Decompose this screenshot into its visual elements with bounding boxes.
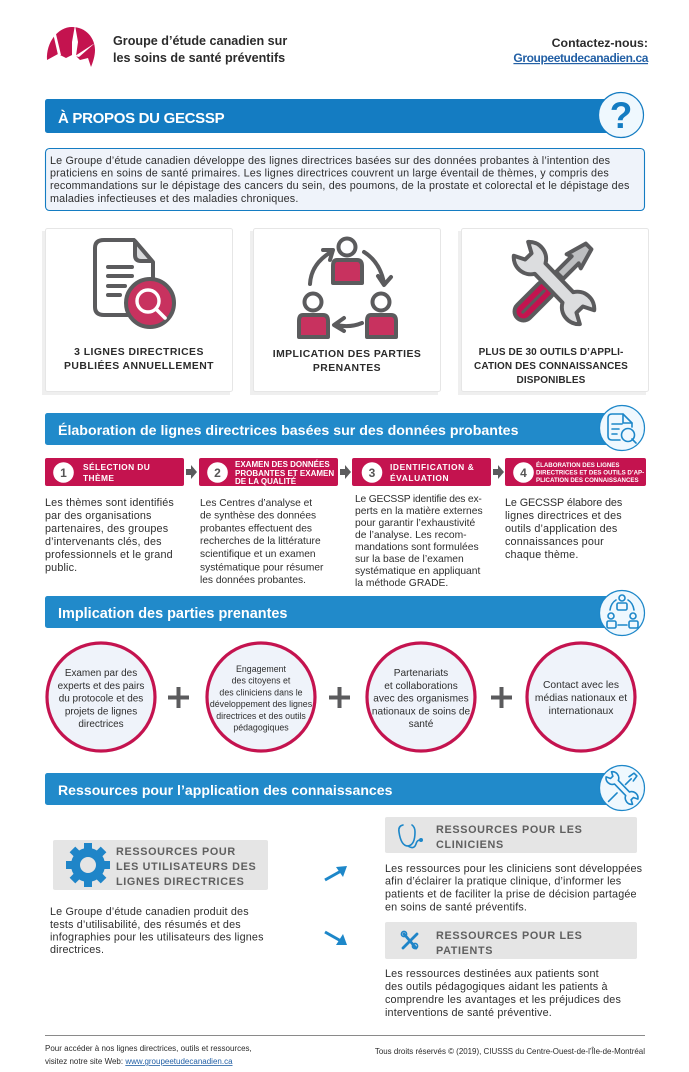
text: patients: Les ressources destinées aux patients sont (385, 968, 599, 980)
step 4: 4 (520, 466, 527, 480)
step 4: outils d’application des (505, 523, 618, 535)
logo: maple leaf (47, 25, 95, 67)
circle: examen: Examen par des (65, 668, 137, 679)
step 2: DE LA QUALITÉ (235, 477, 297, 486)
arrow (340, 465, 351, 479)
step 1: professionnels et le grand (45, 549, 173, 561)
about text panel: maladies infectieuses et des maladies chroniques. (50, 193, 299, 205)
circle: engagement: des citoyens et (232, 676, 291, 686)
step 4 (505, 458, 646, 561)
heading: élaboration: Élaboration de lignes directrices basées sur des données probantes (58, 422, 519, 439)
circle: examen (47, 643, 155, 751)
heading: à propos: ? (610, 95, 632, 136)
resource box: patients (385, 922, 637, 959)
card: outils: DISPONIBLES (517, 375, 586, 386)
heading: ressources (45, 766, 644, 810)
card: parties prenantes: PRENANTES (313, 363, 381, 374)
resource box: cliniciens: CLINICIENS (436, 839, 504, 851)
step 1: par des organisations (45, 510, 152, 522)
step 1: partenaires, des groupes (45, 523, 169, 535)
circle: engagement (207, 643, 315, 751)
circle: examen: experts et des pairs (58, 681, 144, 692)
step 3: 3 (369, 466, 376, 480)
step 1: d’intervenants clés, des (45, 536, 162, 548)
text: patients: des outils pédagogiques aidant les patients à (385, 981, 608, 993)
circle: engagement: des cliniciens dans le (219, 687, 303, 697)
circle: partenariats (367, 643, 475, 751)
step 1: SÉLECTION DU (83, 462, 150, 472)
heading: élaboration (45, 406, 644, 450)
circle: examen: directrices (78, 719, 124, 730)
circle: partenariats: Partenariats (394, 668, 448, 679)
step 1 (45, 458, 184, 574)
plus (329, 687, 350, 708)
icon: wrench and screwdriver (510, 238, 598, 328)
step 4: DIRECTRICES ET DES OUTILS D’AP- (536, 470, 644, 477)
icon: three people with arrows (299, 238, 396, 337)
text: utilisateurs: infographies pour les utilisateurs des lignes (50, 932, 264, 944)
step 3: sur la base de l’examen (355, 554, 464, 565)
text: cliniciens: en soins de santé préventifs. (385, 902, 527, 914)
text: cliniciens: patients et de faciliter la prise de décision partagée (385, 889, 637, 901)
footer: access note: www.groupeetudecanadien.ca (124, 1057, 233, 1066)
step 2: systématique pour résumer (200, 562, 324, 573)
step 4: PLICATION DES CONNAISSANCES (536, 477, 639, 484)
card: lignes directrices: 3 LIGNES DIRECTRICES (74, 347, 204, 358)
step 3: systématique en appliquant (355, 566, 481, 577)
text: utilisateurs: Le Groupe d’étude canadien produit des (50, 906, 249, 918)
icon: stethoscope (399, 825, 423, 848)
icon: tools (401, 931, 418, 949)
text: cliniciens: Les ressources pour les cliniciens sont développées (385, 863, 642, 875)
step 3: Le GECSSP identifie des ex- (355, 494, 482, 505)
step 3: ÉVALUATION (390, 472, 449, 483)
circle: contact: internationaux (549, 706, 614, 717)
circle: contact: Contact avec les (543, 680, 619, 691)
resource box: cliniciens (385, 817, 637, 853)
card: lignes directrices: PUBLIÉES ANNUELLEMENT (64, 359, 214, 372)
step 2: de synthèse des données (200, 511, 316, 522)
circle: partenariats: nationaux de soins de (372, 706, 470, 717)
step 4: lignes directrices et des (505, 510, 622, 522)
circle: contact (527, 643, 635, 751)
resource box: patients: PATIENTS (436, 945, 493, 957)
resource box: utilisateurs: RESSOURCES POUR (116, 846, 236, 858)
circle: partenariats: avec des organismes (373, 694, 469, 705)
card: parties prenantes (250, 228, 440, 395)
text: patients: interventions de santé préventive. (385, 1007, 552, 1019)
step 3: de l’analyse. Les recom- (355, 530, 467, 541)
card: outils (458, 228, 648, 395)
text: utilisateurs: tests d’utilisabilité, des résumés et des (50, 919, 241, 931)
step 2: Les Centres d’analyse et (200, 498, 312, 509)
step 3: mandations sont formulées (355, 542, 479, 553)
step 3: la méthode GRADE. (355, 578, 448, 589)
step 1: 1 (60, 466, 67, 480)
icon: document with magnifier (95, 240, 174, 327)
step 3: perts en la matière externes (355, 506, 483, 517)
resource box: utilisateurs (53, 834, 268, 896)
circle: engagement: Engagement (236, 664, 286, 674)
circle: partenariats: santé (409, 719, 434, 730)
resource box: cliniciens: RESSOURCES POUR LES (436, 824, 583, 836)
resource box: patients: RESSOURCES POUR LES (436, 930, 583, 942)
footer: copyright: Tous droits réservés © (2019), CIUSSS du Centre-Ouest-de-l’Île-de-Montréal (375, 1047, 645, 1056)
organization name: Groupe d’étude canadien sur (113, 34, 287, 48)
text: patients: comprendre les avantages et les préjudices des (385, 994, 621, 1006)
about text panel: praticiens en soins de santé primaires. Les lignes directrices couvrent un large éventail de thèmes, y compris des (50, 168, 609, 180)
heading: à propos (45, 92, 644, 138)
heading: implication: Implication des parties prenantes (58, 606, 287, 622)
step 1: Les thèmes sont identifiés (45, 497, 174, 509)
circle: examen: du protocole et des (59, 694, 143, 705)
step 2: recherches de la littérature (200, 536, 321, 547)
icon: gear (57, 834, 119, 896)
contact: Groupeetudecanadien.ca (513, 51, 649, 65)
arrow: up right (325, 866, 347, 880)
about text panel: Le Groupe d’étude canadien développe des lignes directrices basées sur des données probantes à l’intention des (50, 155, 610, 167)
footer: access note: Pour accéder à nos lignes directrices, outils et ressources, (45, 1044, 252, 1053)
arrow (493, 465, 504, 479)
step 4: Le GECSSP élabore des (505, 497, 623, 509)
icon: tools outline (604, 770, 640, 806)
circle: partenariats: et collaborations (384, 681, 458, 692)
about text panel (46, 148, 644, 210)
step 1: THÈME (83, 472, 114, 483)
circle: examen: projets de lignes (65, 706, 137, 717)
heading: implication (45, 590, 644, 636)
icon: document outline (608, 414, 636, 443)
card: parties prenantes: IMPLICATION DES PARTIES (273, 349, 421, 360)
step 3: IDENTIFICATION & (390, 462, 474, 472)
heading: à propos: À PROPOS DU GECSSP (58, 110, 225, 127)
text: utilisateurs: directrices. (50, 944, 104, 956)
organization name: les soins de santé préventifs (113, 51, 285, 65)
resource box: utilisateurs: LIGNES DIRECTRICES (116, 876, 244, 888)
step 4: connaissances pour (505, 536, 604, 548)
step 2: les données probantes. (200, 575, 306, 586)
step 2: probantes effectuent des (200, 523, 312, 534)
resource box: utilisateurs: LES UTILISATEURS DES (116, 861, 256, 873)
arrow (186, 465, 197, 479)
step 3 (352, 458, 491, 589)
step 1: public. (45, 562, 77, 574)
step 2: EXAMEN DES DONNÉES (235, 460, 330, 469)
step 2 (199, 458, 338, 586)
contact (513, 36, 649, 65)
step 2: PROBANTES ET EXAMEN (235, 469, 334, 478)
circle: engagement: développement des lignes (210, 699, 313, 709)
step 2: scientifique et un examen (200, 549, 316, 560)
arrow: down right (325, 932, 347, 945)
circle: engagement: pédagogiques (233, 722, 289, 732)
about text panel: recommandations sur le dépistage des cancers du sein, des poumons, de la prostate et colorectal et le dépistage des (50, 180, 630, 192)
card: outils: PLUS DE 30 OUTILS D’APPLI- (479, 347, 623, 358)
footer: access note: visitez notre site Web: (45, 1057, 125, 1066)
icon: people outline (607, 595, 638, 628)
step 4: chaque thème. (505, 549, 579, 561)
circle: engagement: directrices et des outils (216, 711, 306, 721)
step 4: ÉLABORATION DES LIGNES (536, 462, 619, 469)
heading: ressources: Ressources pour l’application des connaissances (58, 782, 393, 798)
step 3: pour garantir l’exhaustivité (355, 518, 475, 529)
plus (491, 687, 512, 708)
plus (168, 687, 189, 708)
step 2: 2 (214, 466, 221, 480)
text: cliniciens: afin d’éclairer la pratique clinique, d’informer les (385, 876, 622, 888)
card: lignes directrices (42, 228, 232, 395)
circle: contact: médias nationaux et (535, 693, 627, 704)
contact: Contactez-nous: (552, 36, 648, 50)
card: outils: CATION DES CONNAISSANCES (474, 361, 628, 372)
